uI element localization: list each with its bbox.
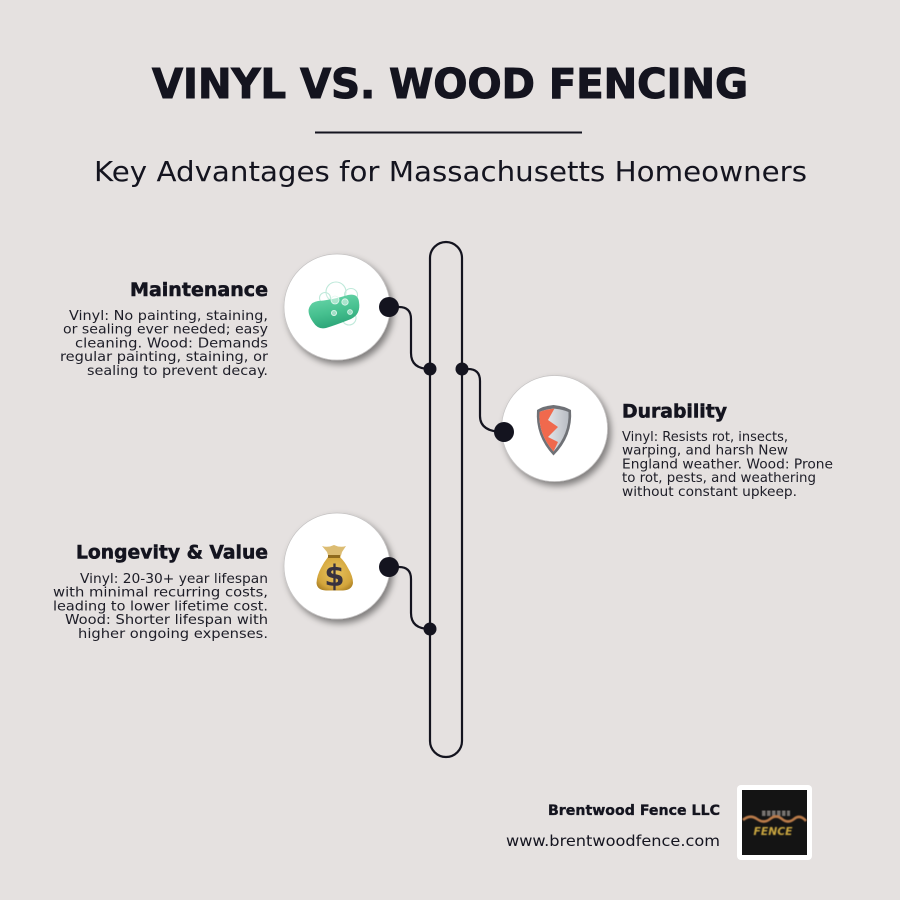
icon: shield [502,376,608,482]
connector: durability [456,362,504,432]
logo: FENCE [754,825,793,838]
panel: maintenance [60,254,399,379]
footer: company name: Brentwood Fence LLC [548,803,720,819]
durability text: Vinyl: Resists rot, insects, [622,430,788,445]
connector: maintenance [389,307,436,376]
durability text: without constant upkeep. [622,485,797,500]
maintenance text: Vinyl: No painting, staining, [69,309,268,324]
durability heading: Durability [622,400,728,422]
icon: money bag [284,513,390,619]
panel: longevity and value [53,513,399,642]
title: VINYL VS. WOOD FENCING [152,60,748,108]
maintenance text [60,309,269,379]
longevity text: Vinyl: 20-30+ year lifespan [80,572,268,587]
node dot: maintenance [379,297,399,317]
subtitle: Key Advantages for Massachusetts Homeowners [94,155,807,188]
central track [430,242,462,757]
maintenance heading: Maintenance [130,279,268,301]
icon: money bag: $ [324,559,345,593]
durability text: to rot, pests, and weathering [622,471,816,486]
footer: website: www.brentwoodfence.com [506,832,720,850]
connector: longevity [389,567,436,636]
logo [737,785,812,860]
longevity text: leading to lower lifetime cost. [53,599,268,614]
durability text: warping, and harsh New [622,444,788,459]
maintenance text: sealing to prevent decay. [87,364,268,379]
durability text: England weather. Wood: Prone [622,457,833,472]
maintenance text: regular painting, staining, or [60,350,269,365]
panel: durability [494,376,833,500]
longevity text: higher ongoing expenses. [78,627,268,642]
longevity text [53,572,268,642]
longevity heading: Longevity & Value [76,542,268,564]
longevity text: Wood: Shorter lifespan with [65,613,268,628]
durability text [622,430,833,500]
maintenance text: or sealing ever needed; easy [63,323,268,338]
node dot: durability [494,422,514,442]
maintenance text: cleaning. Wood: Demands [75,336,268,352]
node dot: longevity [379,557,399,577]
icon: soap [284,254,390,360]
longevity text: with minimal recurring costs, [53,586,268,601]
